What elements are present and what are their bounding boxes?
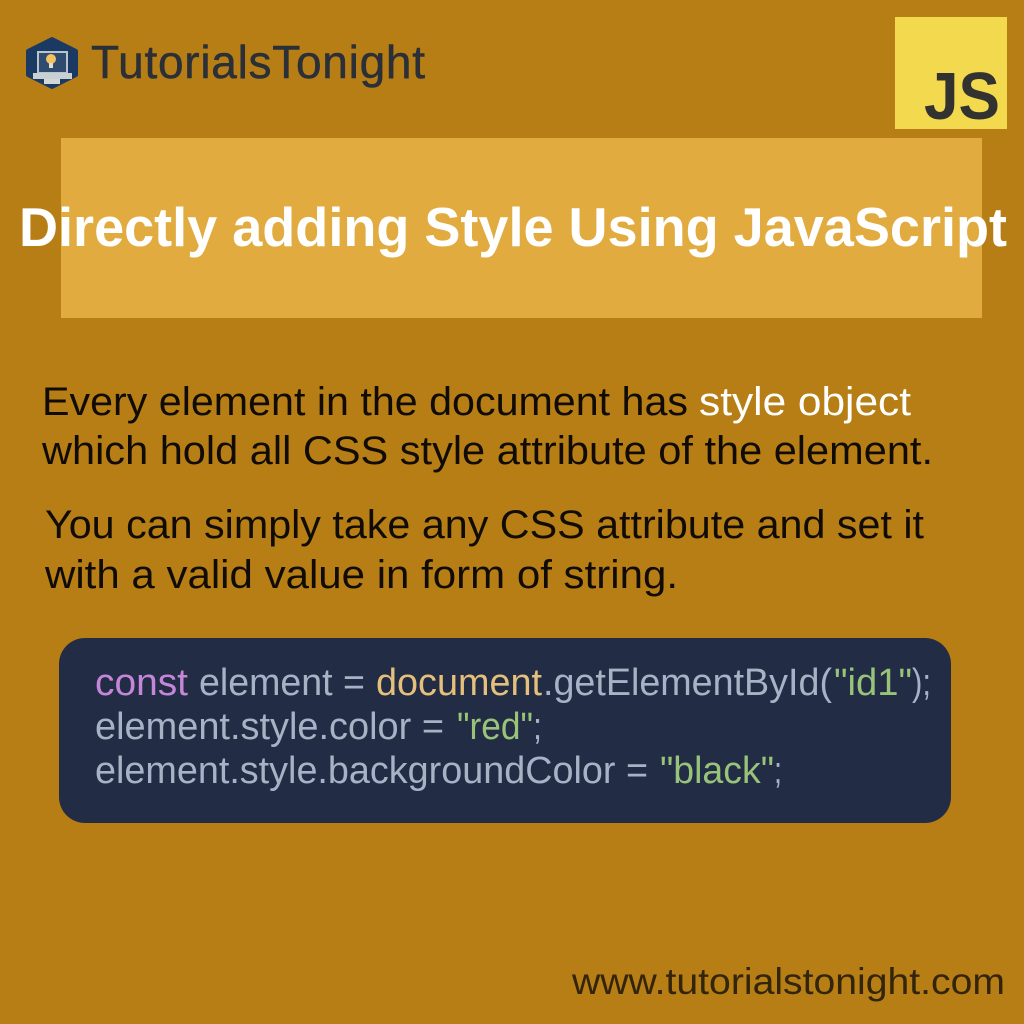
code text: ;	[533, 706, 542, 748]
title: Directly adding Style Using JavaScript	[19, 196, 1007, 258]
code text: document	[376, 662, 542, 704]
title panel	[19, 138, 1007, 318]
icon: JS badge	[895, 17, 1007, 134]
paragraph: style object: style object	[699, 380, 911, 424]
website URL: www.tutorialstonight.com	[571, 961, 1005, 1002]
code text: "id1"	[834, 662, 912, 704]
logo: TutorialsTonight	[28, 36, 425, 88]
code block	[59, 638, 951, 823]
code text: element.style.backgroundColor =	[95, 750, 648, 792]
code text: );	[912, 662, 931, 704]
code text: ;	[774, 750, 782, 792]
paragraph: set attribute: with a valid value in form of string.	[44, 553, 678, 597]
paragraph: style object	[41, 380, 933, 473]
code text: "red"	[457, 706, 533, 748]
icon: hexagon laptop with light bulb	[28, 39, 76, 87]
code text: .getElementById(	[543, 662, 832, 704]
code text: element =	[199, 662, 365, 704]
paragraph: set attribute: You can simply take any CSS attribute and set it	[45, 503, 924, 547]
paragraph: style object: which hold all CSS style attribute of the element.	[41, 429, 933, 473]
logo wordmark: TutorialsTonight	[91, 36, 425, 88]
code text: "black"	[660, 750, 774, 792]
code text: const	[95, 662, 188, 704]
paragraph: style object: Every element in the document has	[42, 380, 688, 424]
code text: element.style.color =	[95, 706, 444, 748]
paragraph: set attribute	[44, 503, 924, 597]
code text	[95, 662, 931, 792]
icon: JS badge: JS	[924, 59, 1000, 134]
